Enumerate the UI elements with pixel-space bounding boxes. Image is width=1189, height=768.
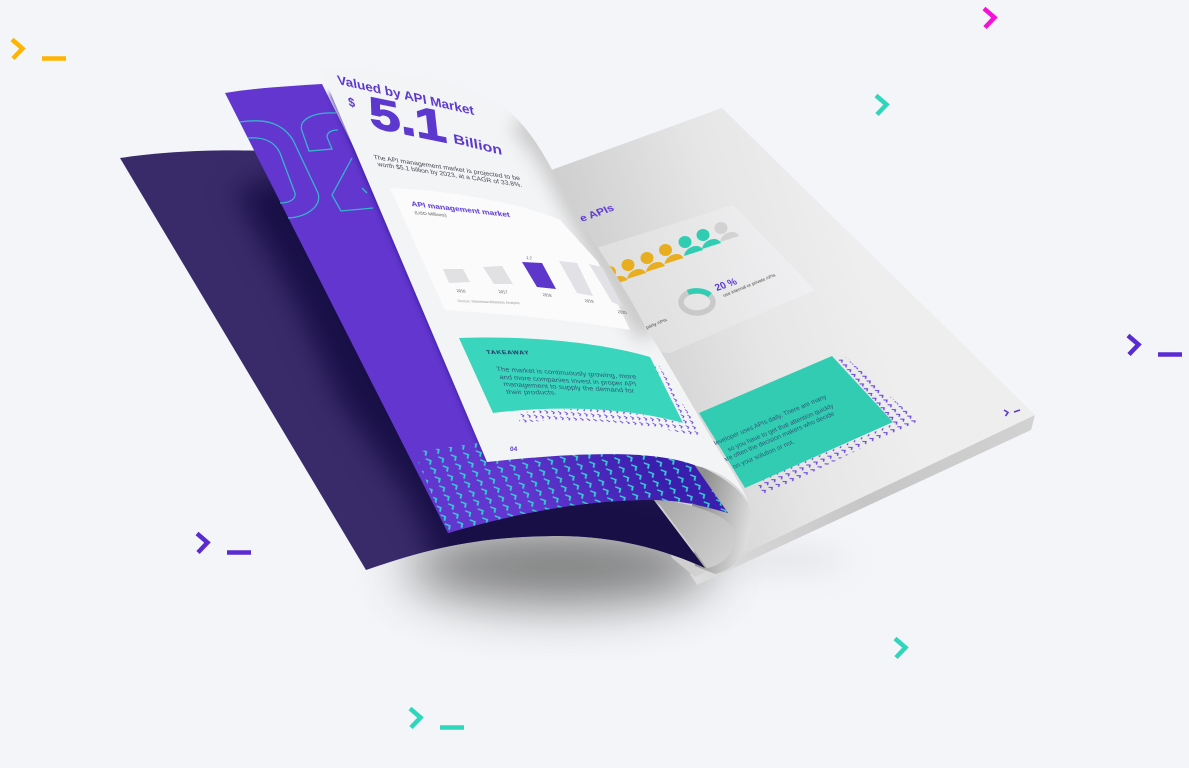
bar value and year labels — [456, 255, 628, 315]
icon: magenta chevron — [984, 8, 994, 28]
page number: 04 — [510, 446, 518, 453]
chart source line: Source: MarketsandMarkets Analysis — [457, 299, 521, 305]
icon: teal chevron and dash bottom — [410, 708, 464, 728]
icon: teal chevron lower right — [895, 638, 906, 658]
billion label: Billion — [452, 131, 503, 158]
bar value and year labels: 2016 — [456, 288, 467, 293]
takeaway text right page: on your solution or not. — [731, 439, 796, 471]
bar value and year labels: 2017 — [498, 289, 509, 294]
heading fragment: e APIs — [578, 203, 617, 225]
teal chevron pattern — [414, 440, 728, 533]
panel: takeaway teal card — [459, 337, 683, 423]
takeaway label: TAKEAWAY — [486, 350, 531, 356]
bar 2016 — [443, 269, 470, 283]
shadow cast by white page — [332, 92, 490, 462]
bar 2018 highlighted — [522, 262, 556, 289]
icon: orange chevron and dash — [12, 40, 66, 58]
page face — [535, 108, 1035, 577]
other stat caption fragment: party APIs — [645, 317, 669, 330]
dollar sign: $ — [347, 95, 356, 110]
drop shadow under booklet — [405, 528, 850, 604]
bar 2020 — [589, 264, 623, 307]
takeaway text right page: are often the decision makers who decide — [722, 411, 836, 464]
curved page shading — [520, 120, 650, 335]
takeaway text: their products. — [505, 389, 558, 396]
page stack edge — [690, 415, 1035, 585]
panel: API usage card — [590, 205, 815, 353]
person icons row — [603, 222, 739, 286]
purple chevron pattern right of teal card — [757, 354, 918, 496]
takeaway text: management to supply the demand for — [502, 381, 636, 395]
bar value and year labels: 1.2 — [526, 255, 533, 260]
donut chart 20 percent — [681, 291, 713, 313]
panel: bar chart card — [390, 188, 630, 330]
icon: purple chevron and dash left — [197, 534, 251, 552]
page marker icon — [1004, 410, 1020, 416]
purple chevron pattern around teal card — [517, 364, 704, 438]
bar 2019 — [559, 261, 593, 296]
heading: valued by API market: Valued by API Market — [336, 73, 475, 118]
stat 20 percent: 20 % — [713, 277, 739, 294]
large outlined number 02 — [240, 113, 373, 218]
panel: teal takeaway card right page — [699, 356, 893, 488]
bar value and year labels: 2018 — [542, 292, 553, 298]
dark back cover page — [120, 150, 720, 590]
big number 5.1: 5.1 — [367, 88, 449, 153]
purple inside page — [225, 84, 728, 533]
takeaway text — [496, 366, 638, 396]
bar value and year labels: 2020 — [617, 309, 628, 315]
chart subtitle: (USD Millions) — [414, 210, 448, 218]
dark shaded band at page foot — [414, 440, 728, 533]
intro paragraph: worth $5.1 billion by 2023, at a CAGR of 33.8%. — [376, 161, 523, 189]
intro paragraph — [373, 154, 523, 189]
inner curl of page — [650, 498, 735, 568]
intro paragraph: The API management market is projected to be — [373, 154, 522, 182]
bar 2017 — [483, 266, 513, 284]
takeaway text: The market is continuously growing, more — [496, 366, 638, 381]
roll crescent behind the turned page — [690, 462, 752, 574]
takeaway text: and more companies invest in proper API — [498, 374, 638, 388]
takeaway text right page: developer uses APIs daily. There are many — [711, 393, 829, 448]
icon: teal chevron top — [876, 96, 886, 114]
right page of booklet — [535, 108, 1035, 585]
takeaway text right page — [711, 393, 836, 471]
icon: purple chevron and dash right — [1128, 336, 1182, 354]
bar value and year labels: 2019 — [584, 298, 595, 304]
stat caption: use internal or private APIs — [722, 272, 777, 298]
white turned page — [320, 68, 752, 510]
takeaway text right page: so you have to get that attention quickly — [726, 402, 836, 453]
chart title: API management market — [410, 199, 512, 219]
